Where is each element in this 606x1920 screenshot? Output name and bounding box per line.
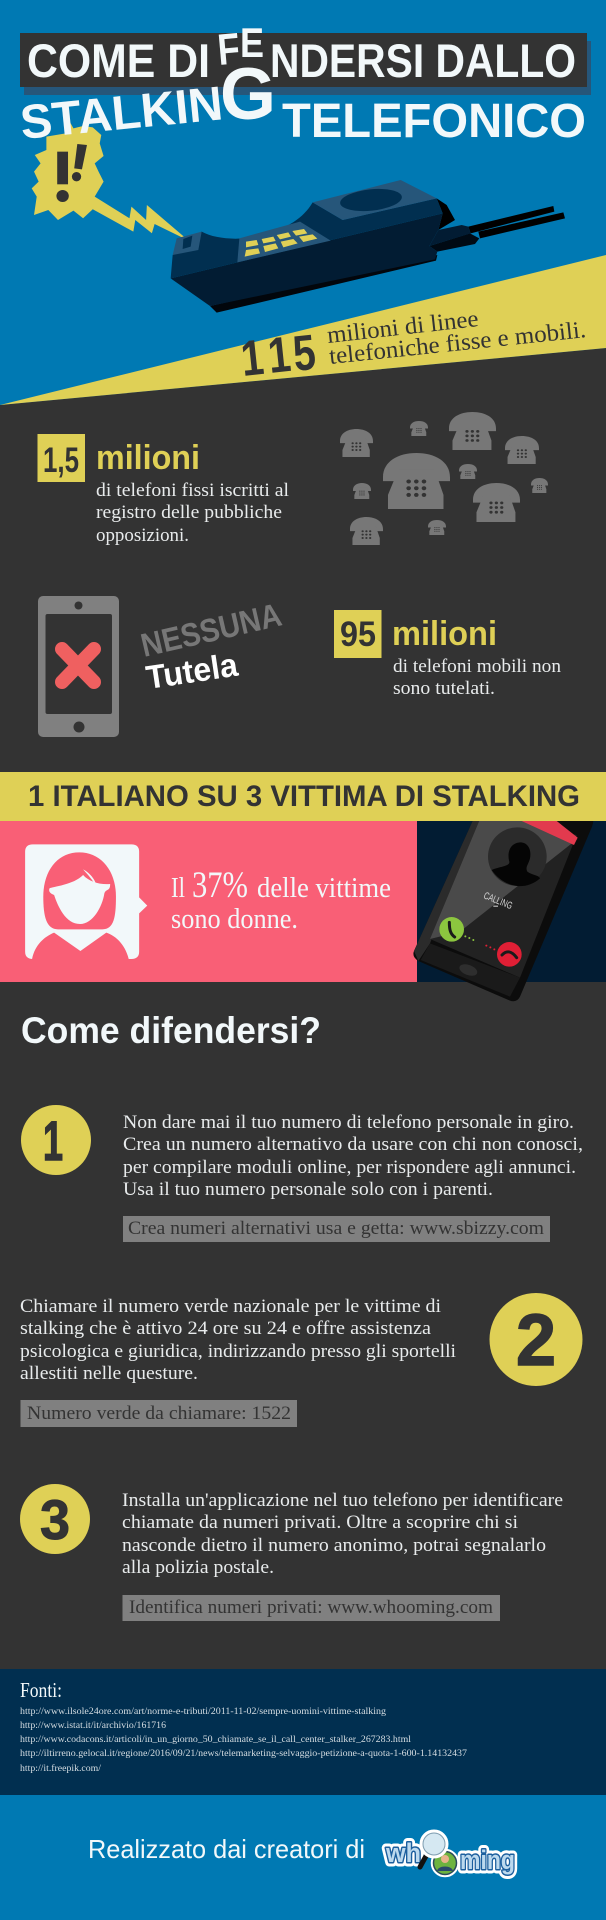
step 1: per compilare moduli online, per rispondere agli annunci.	[123, 1157, 576, 1178]
heading band: 1 italiano su 3	[0, 772, 606, 821]
panel: sources: http://it.freepik.com/	[20, 1763, 101, 1774]
step 3: alla polizia postale.	[122, 1557, 274, 1578]
step 1: 1	[43, 1109, 63, 1172]
banner figure: 115: 1	[265, 326, 293, 384]
victims text	[171, 865, 391, 935]
heading band: 1 italiano su 3: 1 ITALIANO SU 3 VITTIMA DI STALKING	[28, 780, 580, 813]
step 1	[21, 1105, 583, 1242]
step 1: Crea numeri alternativi usa e getta: www.sbizzy.com	[128, 1218, 544, 1239]
logo: whooming: wh	[385, 1838, 421, 1868]
title text: TELEFONICO	[282, 95, 586, 148]
step 2: Numero verde da chiamare: 1522	[27, 1403, 291, 1424]
step 2	[20, 1293, 582, 1427]
footer credit text: Realizzato dai creatori di	[88, 1834, 365, 1864]
icon: woman speech bubble	[25, 844, 147, 959]
victims text: 37%	[192, 865, 248, 906]
step 3: Identifica numeri privati: www.whooming.com	[129, 1597, 493, 1618]
step 2: Chiamare il numero verde nazionale per le vittime di	[20, 1296, 441, 1317]
step 3: nasconde dietro il numero anonimo, potrai segnalarlo	[122, 1535, 546, 1556]
label: nessuna tutela	[137, 596, 285, 696]
logo: whooming	[385, 1831, 515, 1876]
title text: COME DI	[27, 34, 210, 87]
banner text: milioni di linee	[326, 306, 480, 349]
stat: 95 milioni	[334, 610, 561, 699]
title bar shadow	[24, 41, 591, 95]
yellow banner wedge	[0, 255, 606, 405]
stat: 1,5 milioni: opposizioni.	[96, 525, 189, 546]
step 2: allestiti nelle questure.	[20, 1363, 198, 1384]
stat: 1,5 milioni: di telefoni fissi iscritti al	[96, 480, 289, 501]
step 1: Non dare mai il tuo numero di telefono personale in giro.	[123, 1112, 574, 1133]
step 3: 3	[40, 1488, 70, 1551]
panel: sources	[0, 1669, 606, 1795]
step 2: psicologica e giuridica, indirizzando presso gli sportelli	[20, 1341, 456, 1362]
title text: STALKIN	[18, 77, 225, 150]
icon: retro mobile phone	[171, 180, 565, 313]
victims text: sono donne.	[171, 904, 298, 935]
panel: sources: http://www.codacons.it/articoli/in_un_giorno_50_chiamate_se_il_call_center_stalker_267283.html	[20, 1735, 411, 1745]
title text: F	[216, 24, 242, 75]
stat: 1,5 milioni: milioni	[96, 439, 200, 477]
panel: footer	[0, 1795, 606, 1920]
stat: 95 milioni: sono tutelati.	[393, 678, 495, 699]
stat: 1,5 milioni: registro delle pubbliche	[96, 502, 282, 523]
title text	[18, 19, 586, 150]
panel: pink victims band	[0, 821, 417, 982]
stat: 95 milioni: 95	[340, 615, 376, 654]
icon cluster: landline telephones	[340, 412, 548, 545]
victims text: delle vittime	[257, 873, 391, 904]
stat: 1,5 milioni: 1,5	[43, 441, 79, 480]
stat: 95 milioni: milioni	[392, 615, 497, 653]
title text: G	[220, 54, 276, 135]
icon: alert burst with lightning	[32, 120, 189, 241]
background: blue header	[0, 0, 606, 405]
stat: 1,5 milioni	[38, 434, 289, 546]
logo: whooming: ming	[460, 1845, 515, 1875]
panel: sources: Fonti:	[20, 1678, 62, 1702]
banner figure: 115: 5	[290, 324, 318, 382]
label: nessuna tutela: Tutela	[144, 646, 241, 696]
banner figure: 115	[238, 324, 318, 387]
logo: whooming: wh	[385, 1838, 421, 1868]
step 3: chiamate da numeri privati. Oltre a scoprire chi si	[122, 1512, 518, 1533]
step 3: Installa un'applicazione nel tuo telefono per identificare	[122, 1490, 563, 1511]
label: calling: CALLING	[482, 891, 514, 912]
step 1: Usa il tuo numero personale solo con i parenti.	[123, 1179, 493, 1200]
panel: sources: http://www.istat.it/it/archivio/161716	[20, 1721, 166, 1731]
title bar	[20, 33, 587, 87]
step 3	[20, 1484, 563, 1621]
banner text: telefoniche fisse e mobili.	[328, 317, 587, 370]
title text: E	[240, 19, 264, 66]
icon: smartphone with red X	[38, 596, 119, 737]
icon: smartphone incoming call	[413, 815, 593, 1001]
heading: come difendersi: Come difendersi?	[21, 1010, 321, 1051]
victims text: Il	[171, 873, 185, 904]
stat: 95 milioni: di telefoni mobili non	[393, 656, 561, 677]
panel: navy phone band	[417, 821, 606, 982]
panel: sources: http://www.ilsole24ore.com/art/norme-e-tributi/2011-11-02/sempre-uomini-vittime-stalking	[20, 1707, 386, 1717]
banner figure: 115: 1	[238, 329, 266, 387]
panel: sources: http://iltirreno.gelocal.it/regione/2016/09/21/news/telemarketing-selvaggio-petizione-a-quota-1-600-1.14132437	[20, 1749, 467, 1759]
step 2: 2	[516, 1300, 556, 1381]
step 2: stalking che è attivo 24 ore su 24 e offre assistenza	[20, 1318, 432, 1339]
step 1: Crea un numero alternativo da usare con chi non conosci,	[123, 1134, 583, 1155]
logo: whooming: ming	[460, 1845, 515, 1875]
label: nessuna tutela: NESSUNA	[137, 596, 285, 664]
